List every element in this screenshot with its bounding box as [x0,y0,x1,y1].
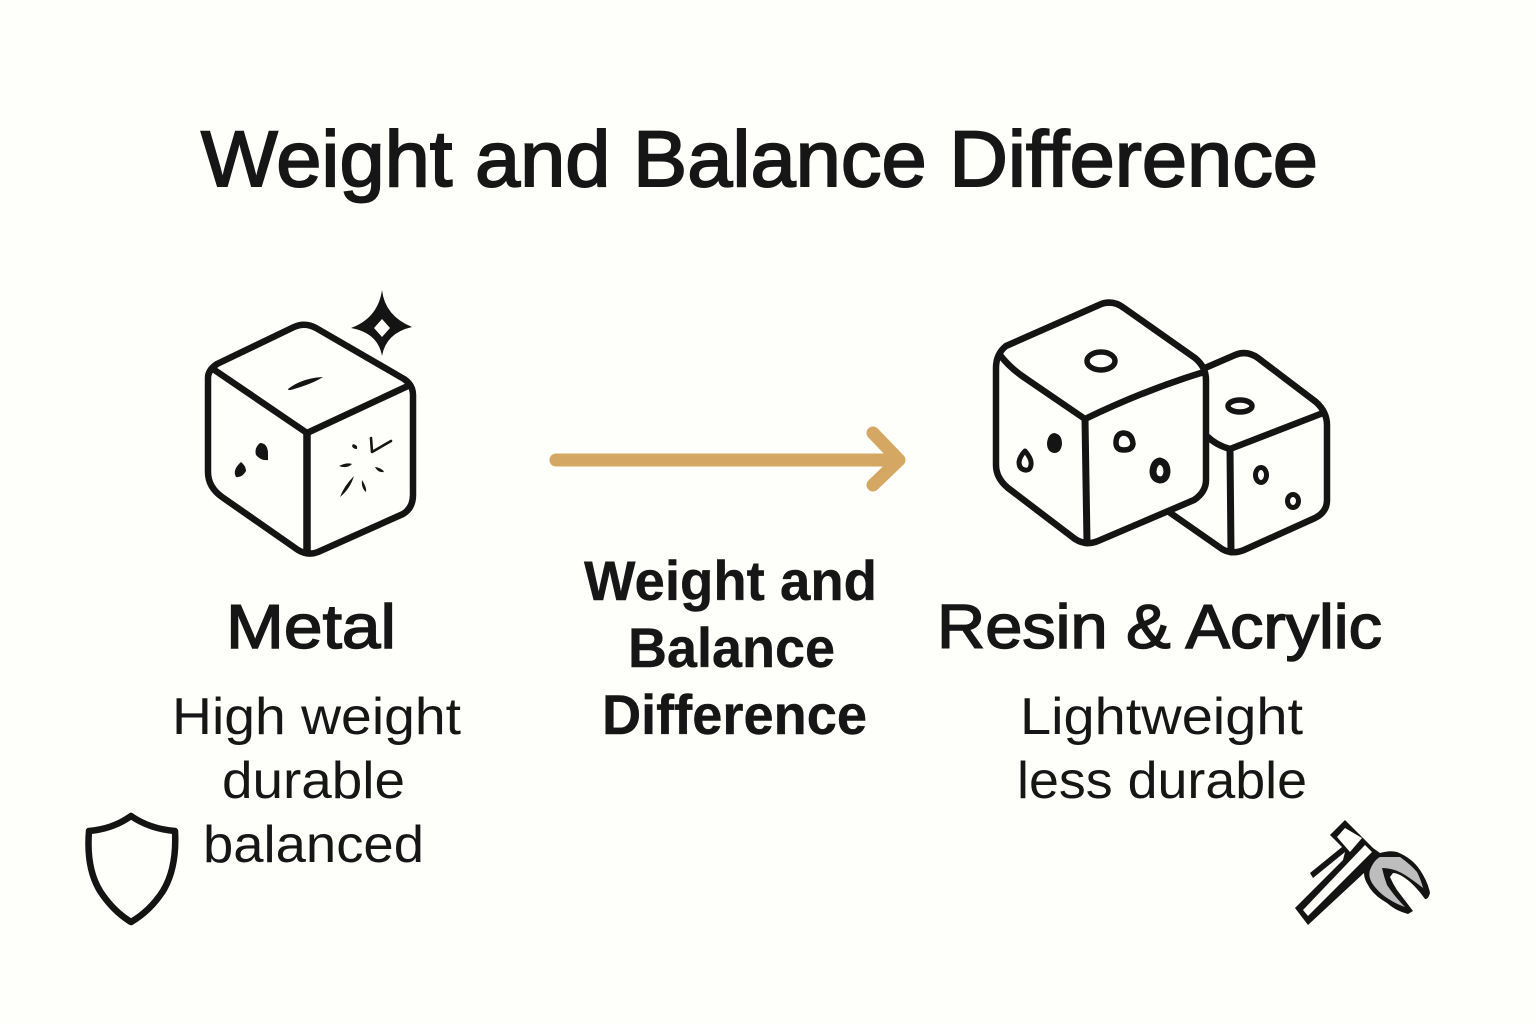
text: metal properties: balanced [203,816,424,874]
icon: small die [1169,353,1327,552]
panel: metal [172,290,462,874]
text: metal properties [172,688,462,874]
arrow [556,433,899,485]
text: resin properties [1017,688,1307,810]
icon: large die [996,303,1206,543]
icon: tools [1295,820,1430,925]
heading: resin and acrylic: Resin & Acrylic [937,593,1382,662]
icon: shield [88,816,175,922]
title: Weight and Balance Difference [201,114,1318,203]
icon: sparkle [351,290,412,356]
heading: metal: Metal [226,593,396,662]
center label: Weight and [584,549,877,612]
icon: metal die [208,325,413,554]
center label [584,549,877,746]
text: resin properties: less durable [1017,752,1307,810]
text: metal properties: High weight [172,688,462,746]
text: metal properties: durable [222,752,405,810]
panel: resin and acrylic [937,303,1382,810]
center label: Balance [628,616,835,679]
center label: Difference [602,683,867,746]
text: resin properties: Lightweight [1020,688,1304,746]
